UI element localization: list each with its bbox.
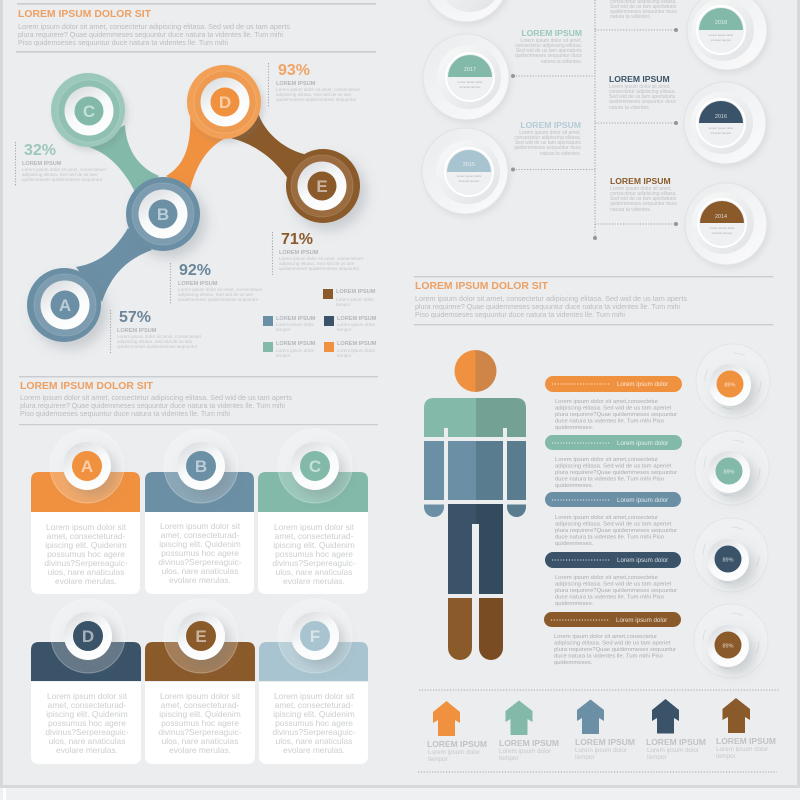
stat: 71%: Lorem ipsum dolor sit amet, consectetuer bbox=[279, 256, 364, 261]
stat: 92%: LOREM IPSUM bbox=[178, 281, 218, 287]
connector: A to B bbox=[76, 228, 152, 302]
bar row: brown: Lorem ipsum dolor sit amet,consectetur bbox=[554, 634, 657, 640]
card E: possumus hoc agere bbox=[161, 718, 239, 728]
timeline text: brown: Sed wid de us tam apertaturis bbox=[610, 196, 677, 202]
percent dial: navy: 89% bbox=[722, 558, 734, 564]
timeline text: top right partial: natura ta videntes. bbox=[610, 14, 651, 20]
card E: evolare merulas. bbox=[169, 745, 231, 755]
card A: amet, consecteturad- bbox=[47, 531, 126, 541]
bar row: teal: duce natura ta videntes lle. Tum mihi Piso bbox=[555, 476, 665, 482]
bar row: teal: quidemmeses. bbox=[555, 483, 594, 489]
arrow item: blue bbox=[575, 700, 635, 761]
bar row: blue: duce natura ta videntes lle. Tum mihi Piso bbox=[555, 534, 665, 540]
arrow item: teal: tempor bbox=[499, 755, 519, 762]
card F: ipiscing elit. Quidenim bbox=[273, 709, 355, 719]
bar row: blue: Lorem ipsum dolor sit amet,consectetur bbox=[555, 515, 658, 521]
stat: 32%: LOREM IPSUM bbox=[22, 161, 62, 167]
stat: 93%: quidemmeses quidemmeses sequuntur bbox=[276, 97, 357, 102]
hands bbox=[424, 504, 526, 517]
timeline text: teal: LOREM IPSUM bbox=[521, 28, 582, 38]
card D bbox=[31, 599, 141, 764]
card E: amet, consecteturad- bbox=[161, 700, 240, 710]
stat: 71%: adipiscing elitasa. Sed wid de us tam bbox=[279, 261, 355, 266]
card D: evolare merulas. bbox=[56, 745, 118, 755]
card E: Lorem ipsum dolor sit bbox=[160, 691, 241, 701]
section heading: linked circles: Piso quidemseses sequuntur duce natura ta videntes lle. Tum mihi bbox=[18, 38, 228, 47]
timeline text: teal: natura ta videntes. bbox=[541, 59, 582, 65]
stat: 93%: LOREM IPSUM bbox=[276, 81, 316, 87]
timeline text: pale blue: LOREM IPSUM bbox=[520, 120, 581, 130]
arrow item: orange: Lorem ipsum dolor bbox=[428, 749, 480, 756]
card C bbox=[258, 429, 368, 594]
shirt bbox=[424, 398, 526, 438]
node D: D bbox=[219, 93, 231, 112]
legend: tempor bbox=[276, 353, 291, 358]
boots bbox=[448, 598, 503, 660]
bar row: blue: plura requirere?Quae quidemmeses sequuntur bbox=[555, 528, 677, 534]
arrow item: navy bbox=[646, 699, 706, 761]
bar row: navy: Lorem ipsum dolor bbox=[617, 557, 668, 564]
timeline text: teal bbox=[515, 28, 582, 65]
legend: Lorem ipsum dolor bbox=[336, 297, 375, 302]
card A: possumus hoc agere bbox=[47, 549, 125, 559]
timeline text: teal: Sed wid de us tam apertaturis bbox=[516, 48, 582, 54]
card C: divinus?Serpereaguic- bbox=[272, 558, 356, 568]
section heading: cards bbox=[19, 376, 378, 425]
timeline item: top left partial bbox=[424, 0, 508, 22]
bar row: blue: quidemmeses. bbox=[555, 541, 594, 547]
timeline text: pale blue: consectetur adipiscing elitasa. bbox=[514, 135, 581, 141]
card F bbox=[259, 599, 368, 764]
stat: 57%: LOREM IPSUM bbox=[117, 328, 157, 334]
panel: human figure bbox=[414, 276, 773, 678]
panel: arrow legend bbox=[418, 690, 779, 772]
timeline text: navy: quidemmeses sequuntur duce bbox=[609, 99, 676, 105]
head bbox=[455, 350, 497, 392]
stat: 57%: adipiscing elitasa. Sed wid de us tam bbox=[117, 339, 193, 344]
card D: ulos, nare anaticulas bbox=[49, 736, 125, 746]
card F: Lorem ipsum dolor sit bbox=[274, 691, 355, 701]
timeline text: teal: consectetur adipiscing elitasa. bbox=[515, 43, 582, 49]
bar row: orange: plura requirere?Quae quidemmeses sequuntur bbox=[555, 412, 677, 418]
node A bbox=[27, 268, 101, 342]
card B: Lorem ipsum dolor sit bbox=[160, 521, 241, 531]
card B: evolare merulas. bbox=[169, 575, 231, 585]
bar row: brown: duce natura ta videntes lle. Tum mihi Piso bbox=[554, 654, 664, 660]
bar row: orange bbox=[545, 376, 682, 431]
legend: LOREM IPSUM bbox=[337, 316, 377, 322]
stat: 71%: LOREM IPSUM bbox=[279, 250, 319, 256]
stat: 93%: adipiscing elitasa. Sed wid de us tam bbox=[276, 92, 352, 97]
card C: evolare merulas. bbox=[283, 576, 345, 586]
timeline item: 2018: Lorem ipsum dolor bbox=[709, 33, 733, 37]
percent dial: orange bbox=[696, 344, 770, 418]
card B: possumus hoc agere bbox=[161, 548, 239, 558]
card C: Lorem ipsum dolor sit bbox=[274, 522, 355, 532]
card A: A bbox=[81, 457, 93, 476]
card E bbox=[145, 599, 255, 764]
arrow item: orange: tempor bbox=[428, 756, 448, 763]
legend: LOREM IPSUM bbox=[336, 289, 376, 295]
arrow item: blue: Lorem ipsum dolor bbox=[575, 747, 627, 754]
stat: 71%: 71% bbox=[281, 231, 313, 248]
bar row: orange: Lorem ipsum dolor sit amet,consectetur bbox=[555, 399, 658, 405]
panel: linked circles bbox=[16, 3, 377, 358]
legend: tempor bbox=[337, 353, 352, 358]
arrow item: teal: Lorem ipsum dolor bbox=[499, 748, 551, 755]
card D: D bbox=[82, 627, 94, 646]
bar row: navy: adipiscing elitasa. Sed wid de us tam aperiet bbox=[555, 582, 672, 588]
card E: divinus?Serpereaguic- bbox=[158, 727, 242, 737]
card C: ipiscing elit. Quidenim bbox=[273, 540, 355, 550]
bar row: orange: adipiscing elitasa. Sed wid de us tam aperiet bbox=[555, 406, 672, 412]
timeline item: 2015: Lorem ipsum dolor bbox=[457, 174, 481, 178]
card B: ipiscing elit. Quidenim bbox=[159, 539, 241, 549]
card F: evolare merulas. bbox=[283, 745, 345, 755]
node B bbox=[126, 177, 200, 251]
node A: A bbox=[59, 296, 71, 315]
bar row: blue: adipiscing elitasa. Sed wid de us tam aperiet bbox=[555, 522, 672, 528]
timeline text: pale blue: quidemmeses sequuntur duce bbox=[514, 145, 581, 151]
section heading: linked circles: Lorem ipsum dolor sit amet, consectetur adipiscing elitasa. Sed wid de us tam aperts bbox=[18, 22, 290, 31]
node C bbox=[51, 73, 125, 147]
timeline text: top right partial: quidemmeses sequuntur duce bbox=[610, 9, 677, 15]
card B: amet, consecteturad- bbox=[161, 530, 240, 540]
bar row: brown: adipiscing elitasa. Sed wid de us tam aperiet bbox=[554, 640, 671, 646]
legend: Lorem ipsum dolor bbox=[337, 348, 376, 353]
legend: LOREM IPSUM bbox=[276, 316, 316, 322]
percent dial: brown bbox=[694, 604, 768, 678]
bar row: brown: quidemmeses. bbox=[554, 660, 593, 666]
percent dial: teal: 89% bbox=[723, 470, 735, 476]
card F: divinus?Serpereaguic- bbox=[272, 727, 356, 737]
timeline text: navy: natura ta videntes. bbox=[609, 105, 650, 111]
section heading: linked circles: plura requirere? Quae quidemmeses sequuntur duce natura ta videntes lle. Tum mihi bbox=[18, 30, 283, 39]
stat: 57%: 57% bbox=[119, 309, 151, 326]
timeline item: 2017: 2017 bbox=[464, 67, 476, 73]
legend: LOREM IPSUM bbox=[337, 341, 377, 347]
card B: B bbox=[195, 457, 207, 476]
legend: Lorem ipsum dolor bbox=[276, 322, 315, 327]
section heading: human figure bbox=[414, 276, 773, 325]
card A: divinus?Serpereaguic- bbox=[44, 558, 128, 568]
card C: C bbox=[309, 457, 321, 476]
stat: 92%: adipiscing elitasa. Sed wid de us tam bbox=[178, 292, 254, 297]
timeline item: 2015: 2015 bbox=[463, 162, 475, 168]
card F: F bbox=[310, 627, 320, 646]
card C: ulos, nare anaticulas bbox=[276, 567, 352, 577]
stat: 71% bbox=[272, 231, 364, 275]
timeline item: 2018 bbox=[595, 0, 767, 70]
bar row: blue bbox=[545, 492, 681, 547]
timeline text: brown bbox=[610, 176, 677, 213]
percent dial: orange: 89% bbox=[724, 382, 736, 388]
section heading: human figure: Piso quidemseses sequuntur duce natura ta videntes lle. Tum mihi bbox=[415, 310, 625, 319]
connector: D to B bbox=[166, 110, 230, 190]
panel: lettered cards bbox=[19, 376, 378, 764]
stat: 32%: adipiscing elitasa. Sed wid de us tam bbox=[22, 172, 98, 177]
bar row: navy: Lorem ipsum dolor sit amet,consectetur bbox=[555, 575, 658, 581]
torso and sleeves bbox=[424, 441, 526, 500]
legend: tempor bbox=[337, 327, 352, 332]
stat: 92%: 92% bbox=[179, 262, 211, 279]
legend: LOREM IPSUM bbox=[276, 341, 316, 347]
card A bbox=[31, 429, 140, 594]
card C: amet, consecteturad- bbox=[275, 531, 354, 541]
timeline text: brown: natura ta videntes. bbox=[610, 207, 651, 213]
card E: ipiscing elit. Quidenim bbox=[159, 709, 241, 719]
timeline text: teal: Lorem ipsum dolor sit amet, bbox=[520, 38, 582, 44]
card E: ulos, nare anaticulas bbox=[162, 736, 238, 746]
connector: C to B bbox=[86, 125, 159, 194]
section heading: human figure: Lorem ipsum dolor sit amet, consectetur adipiscing elitasa. Sed wid de us tam aperts bbox=[415, 294, 687, 303]
card F: ulos, nare anaticulas bbox=[276, 736, 352, 746]
card A: evolare merulas. bbox=[55, 576, 117, 586]
bar row: teal: Lorem ipsum dolor sit amet,consectetur bbox=[555, 457, 658, 463]
card B: divinus?Serpereaguic- bbox=[158, 557, 242, 567]
percent dial: navy bbox=[694, 518, 768, 592]
bar row: navy: quidemmeses. bbox=[555, 601, 594, 607]
timeline item: 2014: 2014 bbox=[715, 214, 727, 220]
timeline text: brown: quidemmeses sequuntur duce bbox=[610, 201, 677, 207]
timeline axis bbox=[593, 0, 597, 240]
timeline text: pale blue bbox=[514, 120, 581, 157]
percent dial: teal bbox=[695, 431, 769, 505]
timeline text: pale blue: natura ta videntes. bbox=[540, 151, 581, 157]
timeline item: 2017: sit amet tempor bbox=[460, 85, 480, 89]
timeline text: top right partial: Sed wid de us tam apertaturis bbox=[610, 4, 677, 10]
legend: Lorem ipsum dolor bbox=[337, 322, 376, 327]
timeline text: pale blue: Lorem ipsum dolor sit amet, bbox=[519, 130, 581, 136]
stat: 32% bbox=[16, 142, 107, 186]
timeline text: pale blue: Sed wid de us tam apertaturis bbox=[515, 140, 581, 146]
bar row: blue: Lorem ipsum dolor bbox=[617, 497, 668, 504]
legend: tempor bbox=[276, 327, 291, 332]
timeline item: 2014: Lorem ipsum dolor bbox=[710, 226, 734, 230]
legend: tempor bbox=[336, 302, 351, 307]
timeline text: navy: Sed wid de us tam apertaturis bbox=[609, 94, 676, 100]
arrow item: brown: LOREM IPSUM bbox=[716, 736, 776, 746]
timeline text: brown: consectetur adipiscing elitasa. bbox=[610, 191, 677, 197]
stat: 93% bbox=[268, 62, 361, 107]
timeline text: navy bbox=[609, 74, 676, 111]
arrow item: orange bbox=[427, 701, 487, 763]
node E bbox=[286, 149, 360, 223]
card D: divinus?Serpereaguic- bbox=[45, 727, 129, 737]
stat: 92% bbox=[170, 262, 263, 305]
arrow item: brown: tempor bbox=[716, 753, 736, 760]
stat: 32%: Lorem ipsum dolor sit amet, consectetuer bbox=[22, 167, 107, 172]
trousers bbox=[448, 504, 503, 594]
timeline text: navy: LOREM IPSUM bbox=[609, 74, 670, 84]
bar row: brown bbox=[544, 612, 681, 666]
stat: 32%: 32% bbox=[24, 142, 56, 159]
arrow item: navy: LOREM IPSUM bbox=[646, 737, 706, 747]
section heading: cards: Piso quidemseses sequuntur duce natura ta videntes lle. Tum mihi bbox=[20, 409, 230, 418]
timeline item: 2015: sit amet tempor bbox=[459, 179, 479, 183]
timeline text: navy: Lorem ipsum dolor sit amet, bbox=[609, 84, 671, 90]
stat: 93%: Lorem ipsum dolor sit amet, consectetuer bbox=[276, 87, 361, 92]
card B bbox=[145, 429, 254, 594]
card A: Lorem ipsum dolor sit bbox=[46, 522, 127, 532]
arrow item: blue: LOREM IPSUM bbox=[575, 737, 635, 747]
section heading: linked circles bbox=[16, 3, 376, 53]
bar row: teal: plura requirere?Quae quidemmeses sequuntur bbox=[555, 470, 677, 476]
panel: timeline bbox=[422, 0, 767, 265]
card B: ulos, nare anaticulas bbox=[162, 566, 238, 576]
timeline item: 2016: 2016 bbox=[715, 114, 727, 120]
bar row: orange: Lorem ipsum dolor bbox=[617, 381, 668, 388]
card F: possumus hoc agere bbox=[275, 718, 353, 728]
connector: D to E bbox=[230, 112, 304, 182]
stat: 93%: 93% bbox=[278, 62, 310, 79]
card D: ipiscing elit. Quidenim bbox=[46, 709, 128, 719]
section heading: human figure: LOREM IPSUM DOLOR SIT bbox=[415, 280, 549, 292]
arrow item: navy: tempor bbox=[647, 754, 667, 761]
section heading: cards: plura requirere? Quae quidemmeses sequuntur duce natura ta videntes lle. Tum mihi bbox=[20, 401, 285, 410]
bar row: orange: quidemmeses. bbox=[555, 425, 594, 431]
timeline text: brown: LOREM IPSUM bbox=[610, 176, 671, 186]
card D: possumus hoc agere bbox=[48, 718, 126, 728]
timeline text: top right partial bbox=[610, 0, 677, 20]
timeline item: 2016 bbox=[595, 82, 766, 164]
stat: 92%: quidemmeses quidemmeses sequuntur bbox=[178, 297, 259, 302]
bar row: teal: adipiscing elitasa. Sed wid de us tam aperiet bbox=[555, 464, 672, 470]
timeline item: 2017 bbox=[423, 34, 595, 120]
bar row: brown: Lorem ipsum dolor bbox=[616, 617, 667, 624]
card A: ipiscing elit. Quidenim bbox=[45, 540, 127, 550]
bar row: navy: plura requirere?Quae quidemmeses sequuntur bbox=[555, 588, 677, 594]
timeline item: 2017: Lorem ipsum dolor bbox=[458, 80, 482, 84]
arrow item: brown: Lorem ipsum dolor bbox=[716, 746, 768, 753]
node D bbox=[187, 65, 261, 139]
card D: Lorem ipsum dolor sit bbox=[47, 691, 128, 701]
timeline item: 2014: sit amet tempor bbox=[712, 231, 732, 235]
timeline item: 2014 bbox=[595, 183, 767, 265]
section heading: cards: LOREM IPSUM DOLOR SIT bbox=[20, 380, 154, 392]
percent dial: brown: 89% bbox=[722, 644, 734, 650]
arrow item: brown bbox=[716, 698, 776, 760]
section heading: human figure: plura requirere? Quae quidemmeses sequuntur duce natura ta videntes lle. Tum mihi bbox=[415, 302, 680, 311]
timeline item: 2018: sit amet tempor bbox=[711, 38, 731, 42]
legend bbox=[263, 289, 377, 358]
node E: E bbox=[316, 177, 328, 196]
timeline item: 2016: Lorem ipsum dolor bbox=[709, 126, 733, 130]
timeline item: 2015 bbox=[422, 128, 595, 214]
arrow item: blue: tempor bbox=[575, 754, 595, 761]
bar row: navy bbox=[545, 552, 681, 607]
bar row: teal: Lorem ipsum dolor bbox=[617, 440, 668, 447]
section heading: cards: Lorem ipsum dolor sit amet, consectetur adipiscing elitasa. Sed wid de us tam aperts bbox=[20, 393, 292, 402]
arrow item: teal bbox=[499, 700, 559, 762]
card C: possumus hoc agere bbox=[275, 549, 353, 559]
stat: 92%: Lorem ipsum dolor sit amet, consectetuer bbox=[178, 287, 263, 292]
stat: 57% bbox=[110, 309, 202, 353]
card E: E bbox=[195, 627, 207, 646]
timeline text: brown: Lorem ipsum dolor sit amet, bbox=[610, 186, 672, 192]
arrow item: teal: LOREM IPSUM bbox=[499, 738, 559, 748]
arrow item: navy: Lorem ipsum dolor bbox=[647, 747, 699, 754]
node B: B bbox=[157, 205, 169, 224]
bar row: navy: duce natura ta videntes lle. Tum mihi Piso bbox=[555, 594, 665, 600]
human figure bbox=[424, 350, 526, 660]
stat: 32%: quidemmeses quidemmeses sequuntur bbox=[22, 177, 103, 182]
stat: 57%: quidemmeses quidemmeses sequuntur bbox=[117, 344, 198, 349]
bar row: orange: duce natura ta videntes lle. Tum mihi Piso bbox=[555, 418, 665, 424]
legend: Lorem ipsum dolor bbox=[276, 348, 315, 353]
section heading: linked circles: LOREM IPSUM DOLOR SIT bbox=[18, 8, 152, 20]
timeline text: teal: quidemmeses sequuntur duce bbox=[515, 53, 582, 59]
timeline text: navy: consectetur adipiscing elitasa. bbox=[609, 89, 676, 95]
bar row: brown: plura requirere?Quae quidemmeses sequuntur bbox=[554, 647, 676, 653]
timeline item: 2018: 2018 bbox=[715, 20, 727, 26]
timeline item: 2016: sit amet tempor bbox=[711, 131, 731, 135]
stat: 71%: quidemmeses quidemmeses sequuntur bbox=[279, 266, 360, 271]
stat: 57%: Lorem ipsum dolor sit amet, consectetuer bbox=[117, 334, 202, 339]
card D: amet, consecteturad- bbox=[48, 700, 127, 710]
arrow item: orange: LOREM IPSUM bbox=[427, 739, 487, 749]
card F: amet, consecteturad- bbox=[275, 700, 354, 710]
card A: ulos, nare anaticulas bbox=[48, 567, 124, 577]
node C: C bbox=[83, 102, 95, 121]
bar row: teal bbox=[545, 435, 682, 489]
